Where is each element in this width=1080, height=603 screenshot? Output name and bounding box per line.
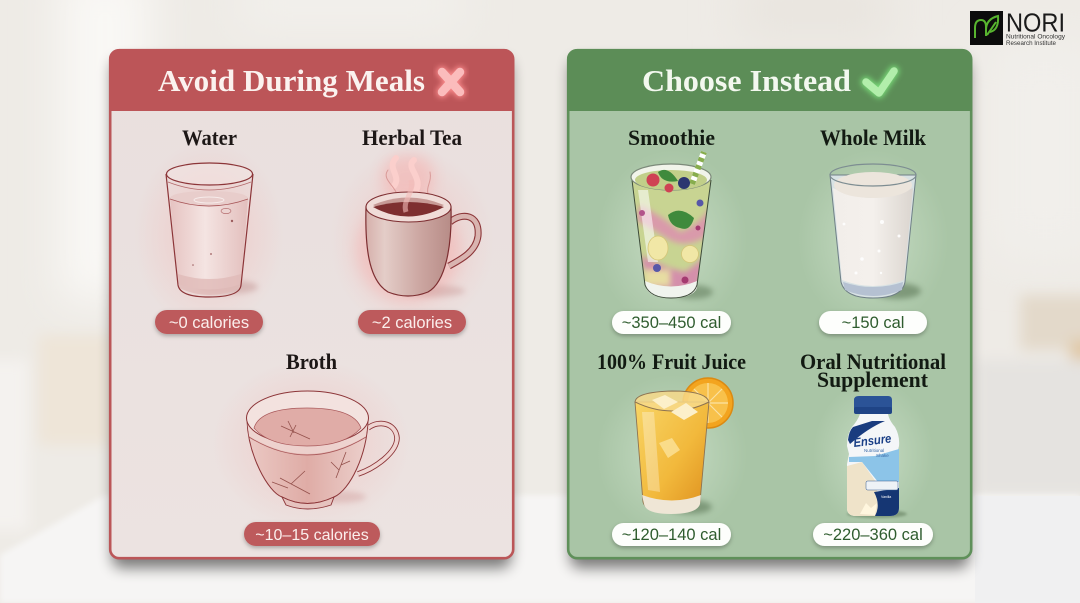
pill: ~220-360 cal bbox=[813, 523, 933, 546]
label: broth: Broth bbox=[286, 349, 337, 374]
pill: ~0 calories: ~0 calories bbox=[169, 314, 249, 332]
pill: ~120-140 cal: ~120–140 cal bbox=[622, 526, 721, 544]
icon: ensure bottle: Nutritional bbox=[864, 448, 884, 453]
label: oral nutritional supplement: Oral Nutritional bbox=[800, 349, 946, 374]
panel header: avoid bbox=[109, 49, 514, 111]
pill: ~0 calories bbox=[155, 310, 263, 334]
icon: smoothie glass bbox=[631, 152, 713, 299]
icon: ensure bottle bbox=[847, 396, 907, 518]
pill: ~350-450 cal: ~350–450 cal bbox=[622, 314, 721, 332]
drink: broth bbox=[211, 349, 411, 546]
label: smoothie: Smoothie bbox=[628, 125, 715, 150]
icon: milk glass bbox=[830, 164, 921, 299]
drink: herbal tea bbox=[330, 125, 494, 334]
panel: choose instead bbox=[567, 49, 972, 568]
pill: ~220-360 cal: ~220–360 cal bbox=[823, 526, 923, 544]
drink: oral nutritional supplement bbox=[800, 349, 946, 546]
label: herbal tea: Herbal Tea bbox=[362, 125, 462, 150]
icon: ensure bottle: Vanilla bbox=[881, 495, 891, 499]
drink: whole milk bbox=[798, 125, 948, 334]
pill: ~150 cal bbox=[819, 311, 927, 334]
icon: steam bbox=[382, 155, 434, 212]
pill: ~10-15 calories bbox=[244, 522, 380, 546]
drink: water bbox=[134, 125, 284, 334]
heading: avoid during meals: Avoid During Meals bbox=[158, 63, 425, 98]
icon: red cross bbox=[442, 72, 460, 92]
heading: choose instead: Choose Instead bbox=[642, 63, 851, 98]
label: oral nutritional supplement: Supplement bbox=[817, 367, 929, 392]
panel header: choose bbox=[567, 49, 972, 111]
logo: NORI: Nutritional Oncology bbox=[1006, 34, 1066, 40]
label: oral nutritional supplement bbox=[800, 349, 946, 392]
icon: water glass bbox=[166, 163, 258, 297]
logo: NORI: NORI bbox=[1006, 10, 1065, 38]
pill: ~2 calories: ~2 calories bbox=[372, 314, 452, 332]
pill: ~120-140 cal bbox=[612, 523, 731, 546]
drink: fruit juice bbox=[597, 349, 747, 546]
icon: mug bbox=[366, 180, 478, 297]
label: whole milk: Whole Milk bbox=[820, 125, 927, 150]
drink: smoothie bbox=[610, 130, 733, 338]
icon: glass broth cup bbox=[246, 391, 397, 509]
icon: ensure bottle: Shake bbox=[876, 453, 889, 458]
label: water: Water bbox=[182, 125, 237, 150]
icon: green check bbox=[866, 71, 894, 93]
pill: ~10-15 calories: ~10–15 calories bbox=[255, 527, 369, 544]
pill: ~150 cal: ~150 cal bbox=[842, 314, 904, 332]
label: 100% fruit juice: 100% Fruit Juice bbox=[597, 349, 746, 374]
icon: juice glass bbox=[635, 378, 733, 514]
pill: ~350-450 cal bbox=[612, 311, 731, 334]
logo: NORI bbox=[970, 10, 1066, 47]
pill: ~2 calories bbox=[358, 310, 466, 334]
icon: ensure bottle: Ensure bbox=[853, 431, 892, 450]
panel: avoid during meals bbox=[109, 49, 514, 568]
logo: NORI: Research Institute bbox=[1006, 40, 1056, 47]
